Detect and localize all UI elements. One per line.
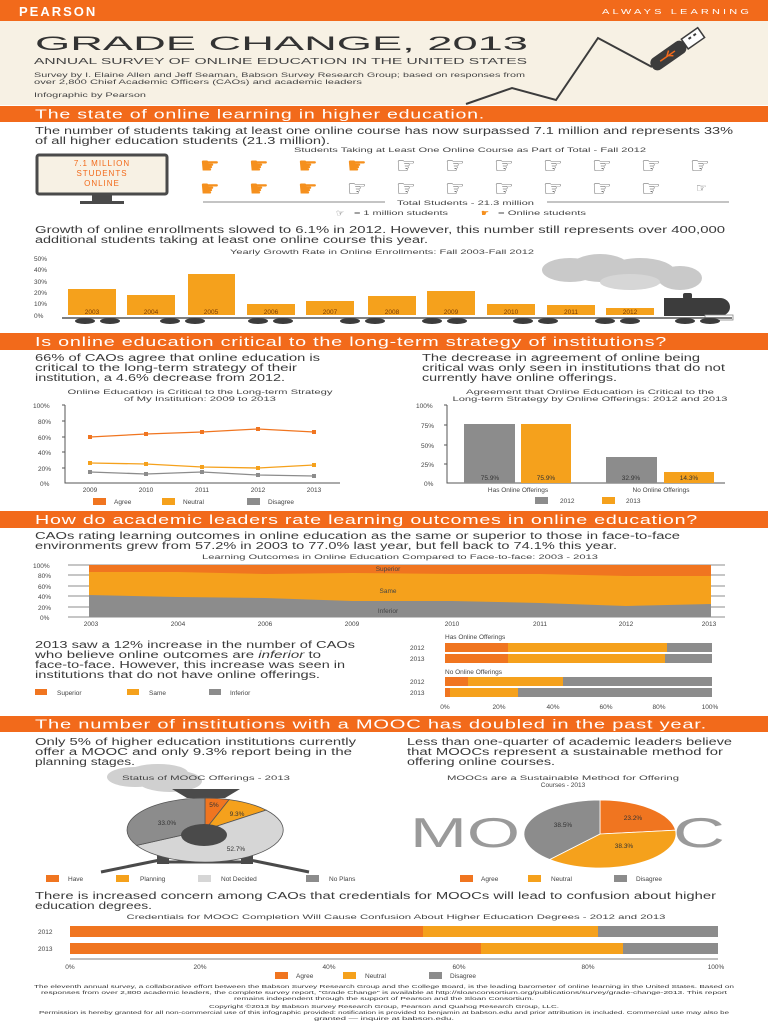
line chart: online education critical 2009-2013: 2011 [195,487,209,494]
pie chart: status of MOOC offerings (train front): Status of MOOC Offerings - 2013 [122,775,291,782]
legend: MOOC status: No Plans [329,876,356,883]
pie chart: status of MOOC offerings (train front): 9.3% [230,811,245,818]
section heading 2: Is online education critical to the long-term strategy of institutions? [35,334,667,349]
legend: superior same inferior: Superior [57,690,82,697]
stacked bar chart: credentials confusion: 20% [193,964,207,971]
icon: monitor 7.1 million students online: 7.1 MILLION [74,159,130,168]
section heading 3: How do academic leaders rate learning outcomes in online education? [35,512,698,527]
text block: 7.1 million: of all higher education students (21.3 million). [35,136,330,147]
text block: less than one-quarter [407,737,733,768]
stacked bars: outcomes by online offerings: No Online Offerings [445,669,503,676]
header bar: ALWAYS LEARNING [602,9,752,16]
chart: students hand pictogram: ☞ [641,154,661,179]
title area [0,21,768,105]
title area: over 2,800 Chief Academic Officers (CAOs) and academic leaders [34,79,363,86]
chart: students hand pictogram [200,147,729,219]
bar chart: agreement by online offerings: Long-term Strategy by Online Offerings: 2012 and 2013 [452,396,728,403]
line chart: online education critical 2009-2013: 80% [38,419,51,426]
stacked bars: outcomes by online offerings: 60% [599,704,613,711]
text block: only 5% offer a MOOC: planning stages. [35,757,135,768]
stacked bars: outcomes by online offerings: 80% [652,704,666,711]
area chart: learning outcomes 2003-2013: Learning Outcomes in Online Education Compared to Face-to-face: 2003 - 2013 [202,554,599,561]
chart: students hand pictogram: ☞ [696,181,707,195]
footer text: Copyright ©2013 by Babson Survey Research Group, Pearson and Quahog Research Group, LLC. [209,1003,559,1010]
title area: Infographic by Pearson [34,92,147,99]
chart: students hand pictogram: ☞ [396,154,416,179]
bar chart: agreement by online offerings: 2013 [626,498,641,505]
area chart: learning outcomes 2003-2013: Same [380,588,397,595]
section heading 2 [0,333,768,350]
pie chart: MOOCs sustainable method: Courses - 2013 [541,782,586,789]
text block: 7.1 million [35,126,733,147]
legend: agree neutral disagree (MOOC): Disagree [636,876,662,883]
chart: students hand pictogram: ☛ [481,209,489,219]
smoke cloud [542,254,702,290]
area chart: learning outcomes 2003-2013: 60% [38,584,51,591]
text block: CAOs rating learning outcomes [35,531,681,552]
text block: credentials concern: There is increased concern among CAOs that credentials for MOOCs will lead to confusion about higher [35,891,717,902]
line chart: online education critical 2009-2013: 0% [40,481,50,488]
section heading 1 [0,106,768,122]
chart: students hand pictogram: ☞ [445,154,465,179]
chart: students hand pictogram: ☛ [249,154,269,179]
line chart: online education critical 2009-2013: Neutral [183,499,205,506]
pie chart: MOOCs sustainable method: 38.5% [554,822,572,829]
text block: decrease in agreement: The decrease in agreement of online being [422,353,700,364]
bar chart: yearly growth rate (train): 2009 [444,309,459,316]
line chart: online education critical 2009-2013: Disagree [268,499,294,506]
chart: students hand pictogram: Students Taking at Least One Online Course as Part of Total - Fall 2012 [294,147,647,154]
line chart: online education critical 2009-2013: 2010 [139,487,154,494]
icon: monitor 7.1 million students online [37,155,167,204]
text block: growth slowed: Growth of online enrollments slowed to 6.1% in 2012. However, this number still represents over 400,000 [35,225,726,236]
bar chart: yearly growth rate (train): 2011 [564,309,578,316]
text block: decrease in agreement: critical was only seen in institutions that do not [422,363,725,374]
bar chart: agreement by online offerings: 100% [416,403,433,410]
icon: monitor 7.1 million students online: ONLINE [84,179,120,188]
stacked bar chart: credentials confusion: 2012 [38,929,53,936]
footer text: Permission is hereby granted for all non-commercial use of this infographic provided: notification is provided to benjamin at babson.edu and prior attribution is included. Commercial use may also be [39,1010,730,1016]
stacked bars: outcomes by online offerings: 2013 [410,690,425,697]
text block: only 5% offer a MOOC: offer a MOOC and only 9.3% report being in the [35,747,353,758]
bar chart: yearly growth rate (train): 30% [34,279,47,286]
chart: students hand pictogram: ☞ [543,177,563,202]
legend: superior same inferior: Same [149,690,166,697]
text block: decrease in agreement: currently have online offerings. [422,373,617,384]
pie chart: status of MOOC offerings (train front) [101,764,309,872]
line chart: online education critical 2009-2013: Online Education is Critical to the Long-term Strategy [68,389,334,396]
footer text: The eleventh annual survey, a collaborative effort between the Babson Survey Research Group and the College Board, is the leading barometer of online learning in the United States. Based on [34,984,735,990]
bar chart: agreement by online offerings: Has Online Offerings [488,487,549,494]
text block: 66% of CAOs [35,353,320,384]
bar chart: agreement by online offerings: Agreement that Online Education is Critical to the [466,389,715,396]
line chart: online education critical 2009-2013: 2009 [83,487,98,494]
text block: less than one-quarter: Less than one-quarter of academic leaders believe [407,737,733,748]
bar chart: yearly growth rate (train): 2004 [144,309,159,316]
bar chart: yearly growth rate (train): 2010 [504,309,519,316]
line chart: online education critical 2009-2013: 2013 [307,487,322,494]
bar chart: yearly growth rate (train): 50% [34,256,47,263]
pie chart: MOOCs sustainable method: 23.2% [624,815,642,822]
text block: 12% increase: face-to-face. However, this increase was seen in [35,660,345,671]
legend: MOOC status: Planning [140,876,166,883]
area chart: learning outcomes 2003-2013: 2004 [171,621,186,628]
bar chart: yearly growth rate (train): 2006 [264,309,279,316]
pie chart: MOOCs sustainable method [410,775,725,868]
area chart: learning outcomes 2003-2013: 2003 [84,621,99,628]
stacked bar chart: credentials confusion: 40% [322,964,336,971]
text block: decrease in agreement [422,353,725,384]
stacked bar chart: credentials confusion: 0% [65,964,75,971]
area chart: learning outcomes 2003-2013 [33,554,725,628]
legend: superior same inferior [35,689,251,697]
text block: less than one-quarter: that MOOCs represent a sustainable method for [407,747,724,758]
line chart: online education critical 2009-2013 [33,389,340,506]
title area: Survey by I. Elaine Allen and Jeff Seaman, Babson Survey Research Group; based on responses from [34,72,525,79]
text block: 12% increase: 2013 saw a 12% increase in the number of CAOs [35,640,355,651]
section heading 4: The number of institutions with a MOOC has doubled in the past year. [35,716,707,732]
pie chart: MOOCs sustainable method: C [673,809,725,856]
legend: MOOC status [46,875,356,883]
legend: agree neutral disagree (MOOC) [460,875,662,883]
text block: only 5% offer a MOOC [35,737,356,768]
area chart: learning outcomes 2003-2013: 40% [38,594,51,601]
train engine [683,293,692,299]
bar chart: yearly growth rate (train): 2005 [204,309,219,316]
chart: students hand pictogram: ☞ [592,154,612,179]
stacked bars: outcomes by online offerings: 0% [440,704,450,711]
area chart: learning outcomes 2003-2013: 100% [33,563,50,570]
pie chart: status of MOOC offerings (train front): 33.0% [158,820,176,827]
area chart: learning outcomes 2003-2013: 20% [38,605,51,612]
icon: monitor 7.1 million students online: STUDENTS [76,169,128,178]
stacked bar chart: credentials confusion: 2013 [38,946,53,953]
text block: 12% increase: who believe online outcomes are inferior to [33,650,322,661]
chart: students hand pictogram: ☞ [336,209,344,219]
stacked bars: outcomes by online offerings: Has Online Offerings [445,634,506,641]
chart: students hand pictogram: ☞ [396,177,416,202]
line chart: online education critical 2009-2013: 20% [38,466,51,473]
area chart: learning outcomes 2003-2013: 0% [40,615,50,622]
chart: students hand pictogram: ☞ [641,177,661,202]
chart: students hand pictogram: Total Students - 21.3 million [397,200,535,207]
pie chart: MOOCs sustainable method: MO [410,809,520,856]
bar chart: yearly growth rate (train): 2008 [385,309,400,316]
pie chart: status of MOOC offerings (train front): 52.7% [227,846,245,853]
line chart: online education critical 2009-2013: of My Institution: 2009 to 2013 [124,396,277,403]
bar chart: agreement by online offerings: 14.3% [680,475,698,482]
stacked bars: outcomes by online offerings: 2013 [410,656,425,663]
legend: MOOC status: Have [68,876,84,883]
bar chart: agreement by online offerings [416,389,728,505]
text block: only 5% offer a MOOC: Only 5% of higher education institutions currently [35,737,356,748]
text block: CAOs rating learning outcomes: CAOs rating learning outcomes in online education as the same or superior to those in face-to-face [35,531,681,542]
bar chart: yearly growth rate (train): 0% [34,313,44,320]
line chart: online education critical 2009-2013: Agree [114,499,132,506]
text block: CAOs rating learning outcomes: environments grew from 57.2% in 2003 to 77.0% last year, but fell back to 74.1% this year. [35,541,617,552]
pie chart: MOOCs sustainable method: 38.3% [615,843,633,850]
text block: 7.1 million: The number of students taking at least one online course has now surpassed 7.1 million and represents 33% [35,126,733,137]
text block: 12% increase: institutions that do not have online offerings. [35,670,320,681]
stacked bar chart: credentials confusion: 80% [581,964,595,971]
stacked bar chart: credentials confusion: Credentials for MOOC Completion Will Cause Confusion About Higher Education Degrees - 2012 and 2013 [126,914,666,921]
text block: 66% of CAOs: 66% of CAOs agree that online education is [35,353,320,364]
footer text: remains independent through the support of Pearson and the Sloan Consortium. [234,996,534,1002]
area chart: learning outcomes 2003-2013: 2011 [533,621,547,628]
line chart: online education critical 2009-2013: 40% [38,450,51,457]
stacked bars: outcomes by online offerings: 2012 [410,645,425,652]
bar chart: yearly growth rate (train): 2003 [85,309,100,316]
line chart: online education critical 2009-2013: 2012 [251,487,266,494]
legend: agree neutral disagree (MOOC): Neutral [551,876,573,883]
chart: students hand pictogram: ☛ [298,177,318,202]
bar chart: agreement by online offerings: 75.9% [481,475,499,482]
chart: students hand pictogram: ☛ [200,177,220,202]
footer text: granted — inquire at babson.edu. [314,1016,454,1022]
bar chart: yearly growth rate (train): Yearly Growth Rate in Online Enrollments: Fall 2003-Fall 2012 [230,249,535,256]
chart: students hand pictogram: ☞ [690,154,710,179]
area chart: learning outcomes 2003-2013: 2009 [345,621,360,628]
bar chart: yearly growth rate (train): 2012 [623,309,638,316]
chart: students hand pictogram: ☛ [298,154,318,179]
stacked bar chart: credentials confusion [38,914,725,980]
legend: agree neutral disagree (MOOC): Agree [481,876,499,883]
text block: growth slowed: additional students taking at least one online course this year. [35,235,428,246]
stacked bar chart: credentials confusion: 100% [708,964,725,971]
line chart: online education critical 2009-2013: 60% [38,435,51,442]
chart: students hand pictogram: = 1 million students [354,210,449,217]
bar chart: yearly growth rate (train) [34,249,733,324]
bar chart: agreement by online offerings: 2012 [560,498,575,505]
text block: 66% of CAOs: critical to the long-term strategy of their [35,363,298,374]
footer text: responses from over 2,800 academic leaders, the complete survey report, "Grade Change" is available at http://sloanconsortium.org/publications/survey/grade-change-2013. This report [41,990,728,996]
stacked bars: outcomes by online offerings: 20% [492,704,506,711]
bar chart: agreement by online offerings: No Online Offerings [633,487,690,494]
text block: less than one-quarter: offering online courses. [407,757,555,768]
area chart: learning outcomes 2003-2013: 2006 [258,621,273,628]
pie chart: status of MOOC offerings (train front): 5% [209,802,219,809]
stacked bar chart: credentials confusion: 60% [452,964,466,971]
chart: students hand pictogram: ☞ [543,154,563,179]
area chart: learning outcomes 2003-2013: 80% [38,573,51,580]
text block: growth slowed [35,225,726,246]
pie chart: MOOCs sustainable method: MOOCs are a Sustainable Method for Offering [447,775,680,782]
text block: 12% increase [33,640,355,681]
text block: credentials concern [35,891,717,912]
stacked bar chart: credentials confusion: Agree [296,973,314,980]
chart: students hand pictogram: ☛ [249,177,269,202]
title area: ANNUAL SURVEY OF ONLINE EDUCATION IN THE UNITED STATES [34,57,527,66]
bar chart: agreement by online offerings: 25% [421,462,434,469]
header bar: PEARSON [19,4,97,19]
chart: students hand pictogram: ☛ [200,154,220,179]
bar chart: yearly growth rate (train): 10% [34,301,47,308]
text block: credentials concern: education degrees. [35,901,152,912]
area chart: learning outcomes 2003-2013: 2012 [619,621,634,628]
area chart: learning outcomes 2003-2013: Superior [376,566,401,573]
stacked bar chart: credentials confusion: Neutral [365,973,387,980]
bar chart: agreement by online offerings: 32.9% [622,475,640,482]
area chart: learning outcomes 2003-2013: 2010 [445,621,460,628]
bar chart: yearly growth rate (train): 40% [34,267,47,274]
stacked bars: outcomes by online offerings: 40% [546,704,560,711]
chart: students hand pictogram: = Online students [498,210,587,217]
bar chart: agreement by online offerings: 0% [424,481,434,488]
chart: students hand pictogram: ☞ [347,177,367,202]
stacked bars: outcomes by online offerings: 2012 [410,679,425,686]
bar chart: yearly growth rate (train): 2007 [323,309,338,316]
bar chart: agreement by online offerings: 75.9% [537,475,555,482]
stacked bar chart: credentials confusion: Disagree [450,973,476,980]
area chart: learning outcomes 2003-2013: 2013 [702,621,717,628]
section heading 3 [0,511,768,528]
legend: MOOC status: Not Decided [221,876,257,883]
title area: GRADE CHANGE, 2013 [35,34,528,55]
bar chart: agreement by online offerings: 75% [421,423,434,430]
stacked bars: outcomes by online offerings: 100% [702,704,719,711]
stacked bars: outcomes by online offerings [410,634,719,711]
chart: students hand pictogram: ☞ [592,177,612,202]
section heading 4 [0,716,768,732]
header bar [0,0,768,21]
section heading 1: The state of online learning in higher education. [35,106,485,122]
chart: students hand pictogram: ☛ [347,154,367,179]
bar chart: yearly growth rate (train): 20% [34,290,47,297]
chart: students hand pictogram: ☞ [445,177,465,202]
icon: growth line with USB plug [466,27,705,104]
chart: students hand pictogram: ☞ [494,154,514,179]
area chart: learning outcomes 2003-2013: Inferior [378,608,399,615]
text block: 66% of CAOs: institution, a 4.6% decrease from 2012. [35,373,285,384]
chart: students hand pictogram: ☞ [494,177,514,202]
line chart: online education critical 2009-2013: 100% [33,403,50,410]
footer text [34,984,735,1022]
bar chart: agreement by online offerings: 50% [421,443,434,450]
legend: superior same inferior: Inferior [230,690,251,697]
